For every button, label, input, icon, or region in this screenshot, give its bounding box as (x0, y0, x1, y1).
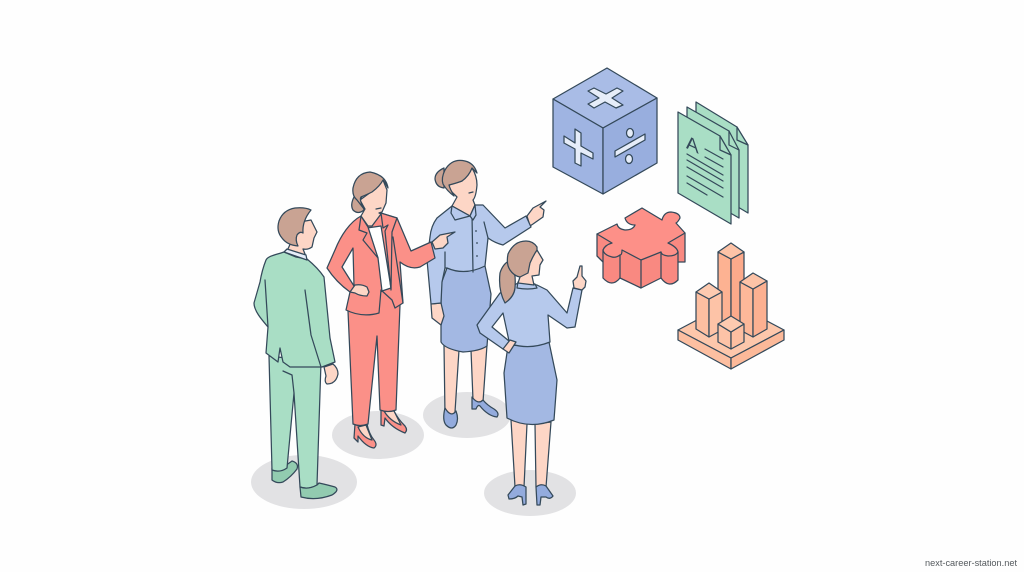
middle page (687, 107, 739, 218)
floor shadow: centre woman (423, 392, 511, 438)
icon: isometric bar chart (678, 243, 784, 369)
coral woman arm gap (342, 248, 354, 286)
coral woman trousers (348, 290, 400, 426)
floor shadow: coral woman (332, 411, 424, 459)
front woman hand on hip (503, 340, 516, 353)
centre woman bun (435, 168, 444, 188)
centre woman skirt (441, 266, 491, 352)
coral woman head (360, 180, 387, 226)
centre woman buttons (475, 230, 478, 257)
front woman shoe right (536, 485, 553, 505)
man jacket (254, 252, 335, 367)
plus sign on left face (564, 129, 593, 166)
divide sign on right face (615, 134, 645, 157)
front woman head (518, 250, 543, 285)
centre woman pointing hand (527, 201, 546, 226)
coral woman shoe right (381, 410, 406, 433)
coral woman lapels (359, 213, 397, 290)
icon: maths cube (553, 68, 657, 194)
man trousers (269, 356, 321, 488)
watermark text: next-career-station.net (925, 558, 1017, 569)
centre woman lower hand (431, 303, 444, 325)
page text lines (687, 149, 723, 197)
small front bar (718, 324, 731, 349)
multiply sign on top (588, 88, 623, 108)
coral woman hair (353, 172, 388, 209)
coral woman hand on hip (350, 285, 369, 296)
front woman arm gap (492, 313, 509, 341)
icon: puzzle piece (597, 208, 685, 288)
front page (678, 112, 731, 224)
coral woman shoe left (354, 424, 376, 448)
front woman ponytail (500, 260, 515, 303)
front woman skirt (504, 342, 557, 425)
back page (696, 102, 748, 213)
centre woman collar (451, 205, 476, 220)
man front shoe (300, 483, 337, 499)
cube top face (553, 68, 657, 128)
front woman raised hand (573, 266, 586, 290)
page letter A: A (686, 132, 699, 159)
man hair (278, 208, 311, 246)
centre woman hair (442, 160, 477, 196)
centre woman blouse (427, 205, 531, 304)
centre woman legs (444, 345, 487, 417)
centre woman shoe right (472, 397, 498, 417)
icon: stack of documents (678, 102, 748, 224)
coral woman jacket (327, 213, 435, 315)
front woman collar (517, 282, 537, 289)
floor shadow: man (251, 455, 357, 509)
figure: man in green suit (251, 208, 357, 509)
front woman hair (507, 241, 537, 277)
cube right face (603, 98, 657, 194)
man head (287, 220, 317, 259)
coral woman pointing hand (432, 232, 455, 249)
front woman blouse (477, 283, 582, 349)
figure: woman from behind, front (477, 241, 586, 516)
right bar (740, 282, 753, 337)
left bar (696, 292, 709, 337)
coral woman bun (352, 197, 364, 212)
man back shoe (272, 461, 297, 483)
man collar (284, 249, 307, 260)
tall bar (718, 252, 731, 325)
centre woman shoe left (444, 408, 458, 428)
cube left face (553, 99, 603, 194)
chart base plate (678, 302, 784, 358)
floor shadow: front woman (484, 470, 576, 516)
man hand (324, 364, 338, 384)
centre woman head (449, 168, 477, 216)
coral woman shirt (367, 226, 391, 291)
figure: woman in blue blouse and skirt, centre (423, 160, 546, 438)
puzzle side walls (597, 233, 685, 288)
figure: woman in coral suit (327, 172, 455, 459)
puzzle top face (597, 208, 685, 260)
front woman shoe left (508, 485, 526, 505)
front woman legs (511, 420, 551, 487)
